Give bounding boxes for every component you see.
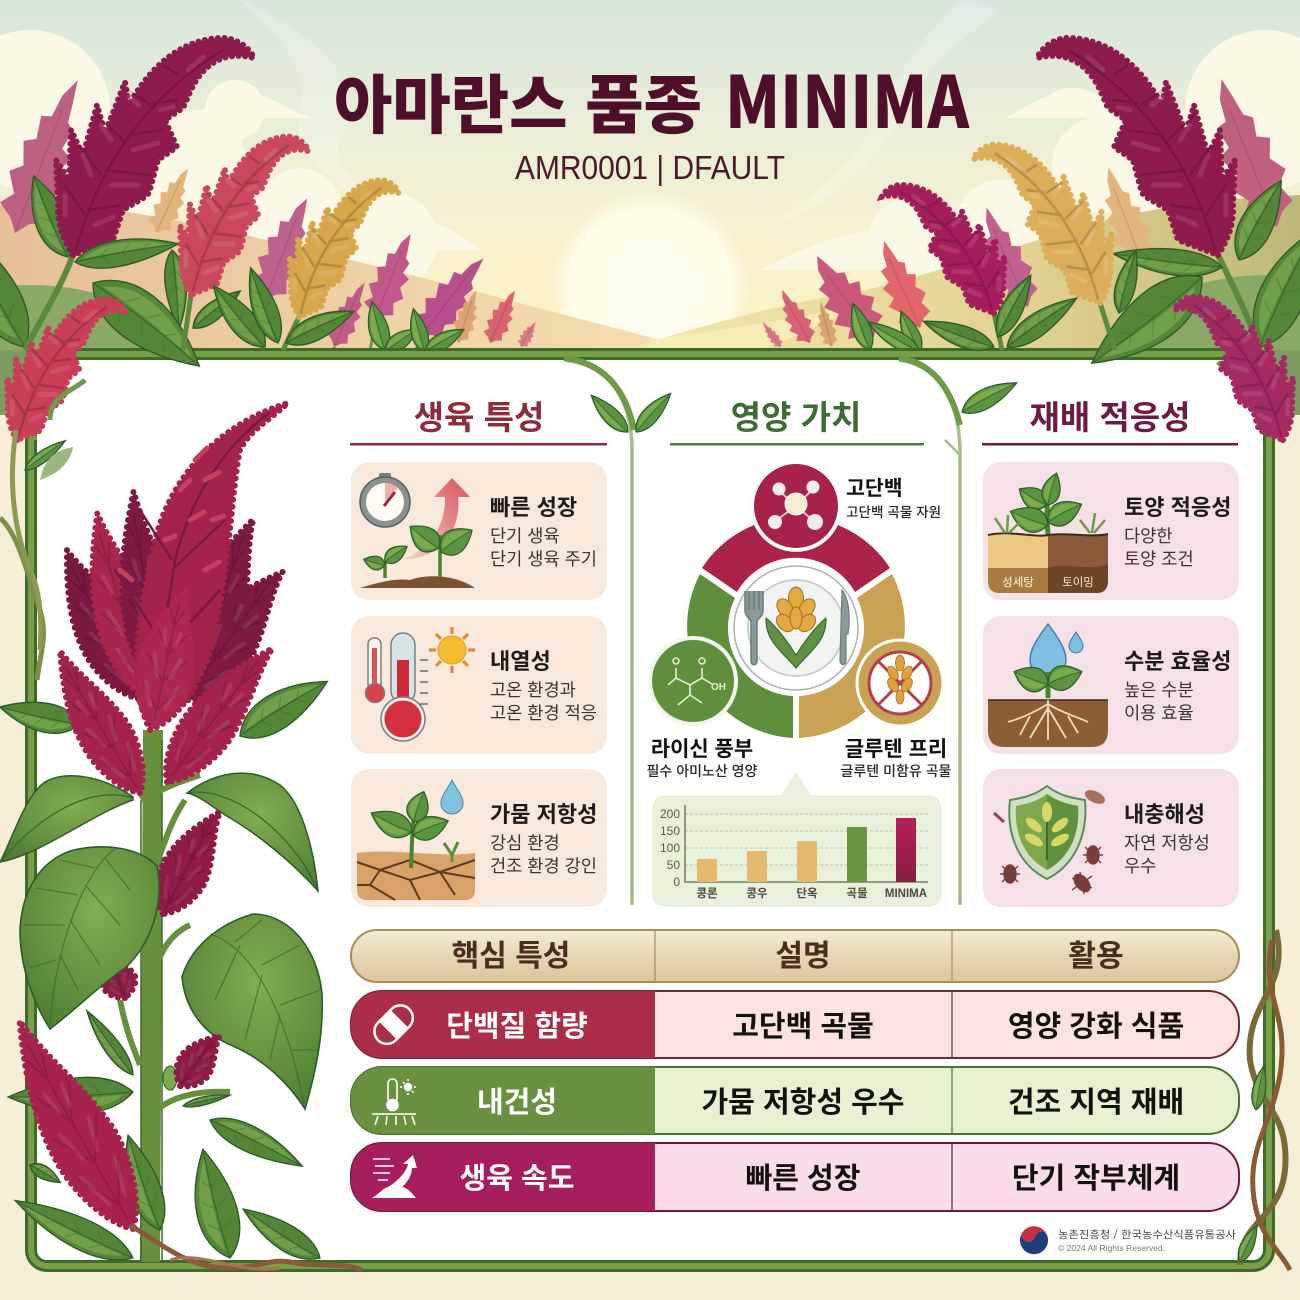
table row: growth speed: 단기 작부체계 (1012, 1155, 1180, 1197)
text (490, 490, 597, 571)
text: 자연 저항성 (1124, 830, 1210, 855)
field of background amaranth left (0, 69, 541, 359)
text: 단기 생육 주기 (490, 546, 597, 571)
bar chart: 50 (667, 858, 680, 872)
text: 내충해성 (1124, 797, 1205, 829)
table header: 활용 (1068, 931, 1124, 975)
icon: stopwatch and growth arrow (360, 473, 479, 588)
title: 아마란스 품종 (334, 55, 702, 147)
table header (351, 930, 1239, 982)
top right amaranth plumes (882, 38, 1300, 440)
title: MINIMA (725, 44, 970, 149)
icon: plant on two soil types (988, 471, 1108, 593)
card: water efficiency (983, 616, 1239, 754)
icon: taegeuk emblem (1020, 1226, 1048, 1254)
icon: rising arrow (372, 1155, 417, 1198)
panel: cultivation adaptability cards (983, 462, 1239, 907)
table row: drought tolerance (351, 1067, 1239, 1134)
icon: lysine molecule: OH (711, 682, 726, 693)
icon: thermometers and sun (366, 627, 475, 741)
table row: growth speed: 생육 속도 (460, 1155, 574, 1197)
label: rich in lysine (647, 733, 758, 781)
card: soil adaptability (983, 462, 1239, 600)
text: 토양 조건 (1124, 546, 1194, 571)
icon: gluten free (857, 640, 943, 726)
heading: growth traits: 생육 특성 (414, 391, 544, 439)
text: 고온 환경과 (490, 677, 576, 702)
table row: growth speed: 빠른 성장 (746, 1155, 860, 1197)
footer logo and credits (1020, 1226, 1236, 1254)
table row: drought tolerance: 건조 지역 재배 (1008, 1079, 1184, 1121)
text: 수분 효율성 (1124, 644, 1231, 676)
text (1124, 644, 1231, 725)
text: 우수 (1124, 853, 1156, 878)
text (1124, 797, 1210, 878)
card: fast growth (351, 462, 607, 600)
nutrition donut diagram (647, 462, 952, 781)
bar chart: 곡물 (846, 885, 868, 901)
subtitle: AMR0001 | DFAULT (515, 149, 785, 186)
ring segment: lysine (687, 574, 793, 738)
leaf: upper left (0, 776, 133, 862)
label: high protein: 고단백 (846, 471, 903, 501)
icon: capsule (369, 1000, 418, 1049)
card: pest resistance (983, 769, 1239, 907)
text (490, 644, 597, 725)
text: 강심 환경 (490, 830, 560, 855)
stem and branches (118, 730, 230, 1262)
panel frame (31, 354, 1269, 1266)
text: 고온 환경 적응 (490, 700, 597, 725)
icon: lysine molecule (650, 638, 736, 724)
label: gluten free: 글루텐 미함유 곡물 (841, 761, 952, 781)
label: high protein (846, 471, 941, 521)
ring segment: protein (702, 517, 890, 592)
bottom and right vines (130, 930, 1290, 1270)
bar chart: 100 (660, 841, 680, 855)
label: high protein: 고단백 곡물 자원 (846, 501, 941, 521)
label: gluten free (841, 733, 952, 781)
text: 이용 효율 (1124, 700, 1194, 725)
title (334, 44, 970, 149)
text: 내열성 (490, 644, 551, 676)
label: rich in lysine: 필수 아미노산 영양 (647, 761, 758, 781)
main flower head (35, 403, 303, 806)
bar chart: 200 (660, 807, 680, 821)
icon: water drop and roots (988, 624, 1108, 747)
footer logo and credits: © 2024 All Rights Reserved. (1058, 1244, 1165, 1253)
text: 빠른 성장 (490, 490, 577, 522)
leaf: big right (182, 914, 322, 1109)
illustration: large amaranth plant (0, 403, 336, 1273)
text: 토양 적응성 (1124, 490, 1231, 522)
column divider vines (564, 358, 1021, 905)
text: 단기 생육 (490, 523, 560, 548)
table row: drought tolerance: 가뭄 저항성 우수 (701, 1079, 905, 1121)
icon: protein molecule (752, 462, 840, 550)
text: 다양한 (1124, 523, 1173, 548)
bar chart: 150 (660, 824, 680, 838)
table row: protein content: 영양 강화 식품 (1008, 1003, 1184, 1045)
table header: 핵심 특성 (452, 931, 570, 975)
leaf: upper right (187, 773, 318, 891)
table row: growth speed (351, 1143, 1239, 1211)
ring segment: gluten free (799, 574, 905, 738)
table row: protein content: 고단백 곡물 (732, 1003, 874, 1045)
label: rich in lysine: 라이신 풍부 (651, 733, 753, 763)
bar chart (652, 772, 942, 907)
icon: plant on two soil types: 성세탕 (1002, 574, 1034, 590)
panel: growth traits cards (351, 462, 607, 907)
leaf: big left (20, 847, 159, 1029)
card: heat tolerance (351, 616, 607, 754)
top left amaranth plumes (0, 38, 399, 440)
bar chart: MINIMA (885, 888, 927, 900)
text: 높은 수분 (1124, 677, 1194, 702)
bar chart: 콩우 (746, 885, 768, 901)
card: drought resistance (351, 769, 607, 907)
heading: nutritional value: 영양 가치 (731, 391, 861, 439)
icon: plant on two soil types: 토이밍 (1062, 574, 1094, 590)
table row: protein content: 단백질 함량 (446, 1003, 588, 1045)
bar chart: 콩론 (696, 885, 718, 901)
text (490, 797, 597, 878)
text: 건조 환경 강인 (490, 853, 597, 878)
bar chart: 0 (673, 875, 680, 889)
field of background amaranth right (758, 69, 1300, 359)
table header: 설명 (775, 931, 831, 975)
icon: shield and insects (994, 786, 1106, 895)
table row: protein content (351, 991, 1239, 1058)
heading: cultivation adaptability: 재배 적응성 (1029, 391, 1191, 439)
text (1124, 490, 1231, 571)
left outer vine (0, 430, 73, 680)
icon: sprout in cracked soil with drop (357, 780, 475, 900)
plate with grain icon (734, 566, 858, 690)
text: 가뭄 저항성 (490, 797, 597, 829)
footer logo and credits: 농촌진흥청 / 한국농수산식품유통공사 (1058, 1227, 1236, 1242)
label: gluten free: 글루텐 프리 (845, 733, 947, 763)
bar chart: 단옥 (796, 885, 818, 901)
table row: drought tolerance: 내건성 (477, 1079, 557, 1121)
icon: thermometer and roots (372, 1079, 416, 1125)
